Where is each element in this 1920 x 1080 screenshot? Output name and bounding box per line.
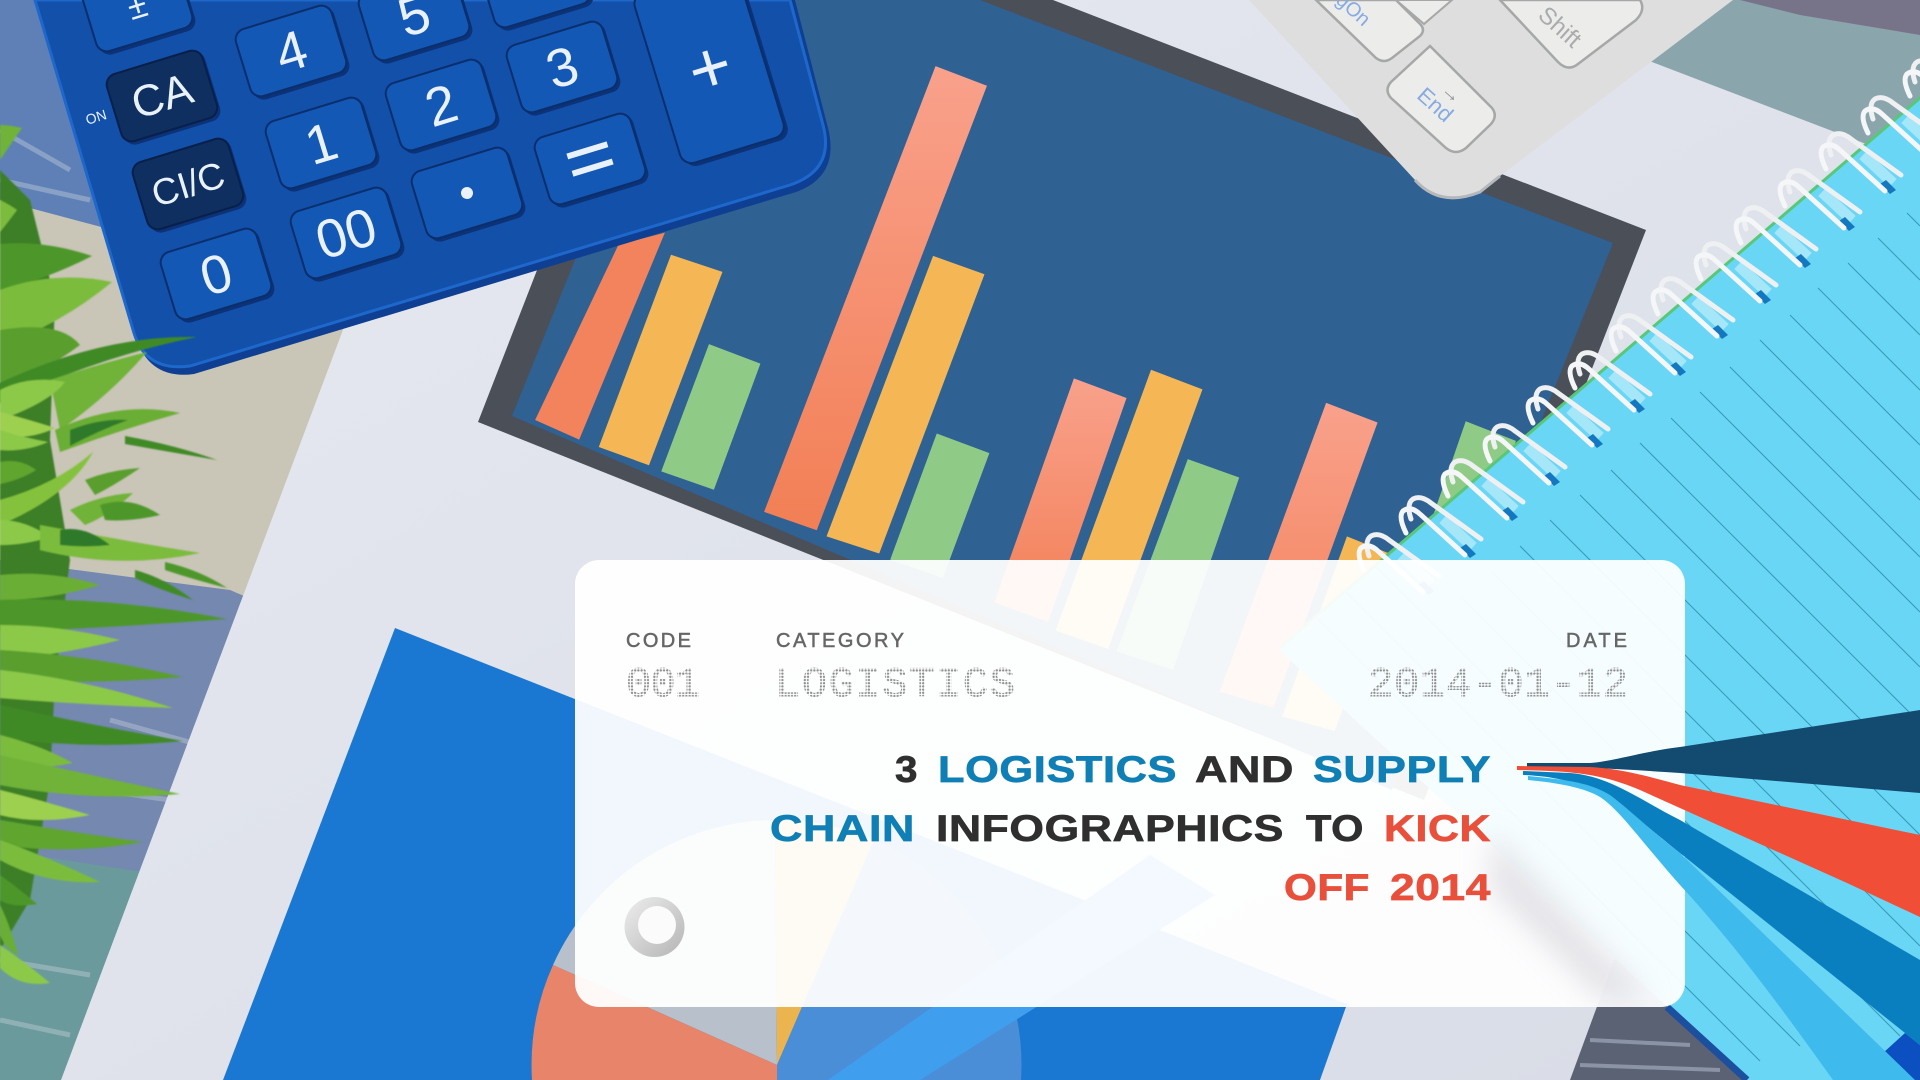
title: AND (1195, 749, 1294, 790)
key legends (1332, 0, 1587, 127)
Shift key (1500, 0, 1642, 68)
key: 00: 00 (309, 196, 384, 271)
title (770, 749, 1491, 908)
upper key (1316, 0, 1423, 61)
title: OFF (1284, 867, 1370, 908)
printed bar chart panel (478, 0, 1646, 800)
field: date (1368, 630, 1628, 709)
key: 3: 3 (539, 35, 585, 101)
key legends: End (1412, 82, 1458, 127)
key: sign (79, 0, 198, 58)
spiral notebook (1279, 61, 1920, 1080)
key legends: Shift (1533, 1, 1587, 54)
key: 1: 1 (298, 111, 344, 177)
key legends: → (1437, 79, 1466, 109)
key: 2: 2 (418, 73, 464, 139)
ribbon: red (1517, 766, 1920, 917)
title: KICK (1384, 808, 1491, 849)
silver keyboard (1249, 0, 1733, 198)
chart bars (535, 66, 1516, 731)
icon: ring logo (624, 897, 684, 957)
title: 2014 (1390, 867, 1491, 908)
key: CA: CA (126, 64, 199, 129)
key: 5 (356, 0, 475, 67)
key: CA (104, 47, 223, 148)
printed pie chart panel (223, 628, 1347, 1080)
blue calculator (35, 0, 831, 375)
pie: grey slice (553, 820, 777, 1065)
field: category (775, 630, 1015, 709)
field: code (626, 630, 700, 709)
field: code: 001 (626, 661, 700, 709)
key: CI/C (130, 135, 249, 236)
key: point (409, 144, 528, 245)
pie: orange slice (532, 965, 777, 1080)
field: date: DATE (1566, 630, 1627, 652)
field: category: LOGISTICS (775, 661, 1015, 709)
title: SUPPLY (1313, 749, 1491, 790)
key: 2 (383, 56, 502, 157)
key: CI/C: CI/C (147, 154, 230, 215)
ribbon: blue (1523, 771, 1920, 1045)
key: plus: + (678, 24, 742, 112)
pie: yellow slice (775, 820, 874, 1065)
ribbon: light blue (1528, 776, 1915, 1080)
title: TO (1306, 808, 1364, 849)
bookmark tab (1883, 1033, 1920, 1080)
key: plus (631, 0, 791, 170)
ribbon: navy (1527, 710, 1920, 793)
key: 6 (477, 0, 596, 34)
title: CHAIN (770, 808, 915, 849)
ruled lines (1520, 212, 1920, 1062)
title: LOGISTICS (938, 749, 1177, 790)
key: 00 (288, 184, 407, 285)
field: category: CATEGORY (776, 630, 904, 652)
spiral binding (1359, 61, 1920, 595)
key: 0 (158, 225, 277, 326)
pen (828, 855, 1215, 1080)
key: 3 (504, 18, 623, 119)
key: equals (532, 110, 651, 211)
title: 3 (895, 749, 918, 790)
field: date: 2014-01-12 (1368, 661, 1628, 709)
title: INFOGRAPHICS (936, 808, 1284, 849)
key: 4: 4 (268, 19, 314, 85)
on label: ON (84, 106, 108, 128)
key: 1 (263, 94, 382, 195)
pie: blue slice (777, 840, 1021, 1080)
field: code: CODE (626, 630, 691, 652)
green plant (0, 125, 227, 984)
card shadow fold (1485, 844, 1636, 1002)
End key (1388, 46, 1495, 152)
key: 4 (233, 2, 352, 103)
translucent info card (575, 560, 1685, 1007)
key: 0: 0 (193, 242, 239, 308)
